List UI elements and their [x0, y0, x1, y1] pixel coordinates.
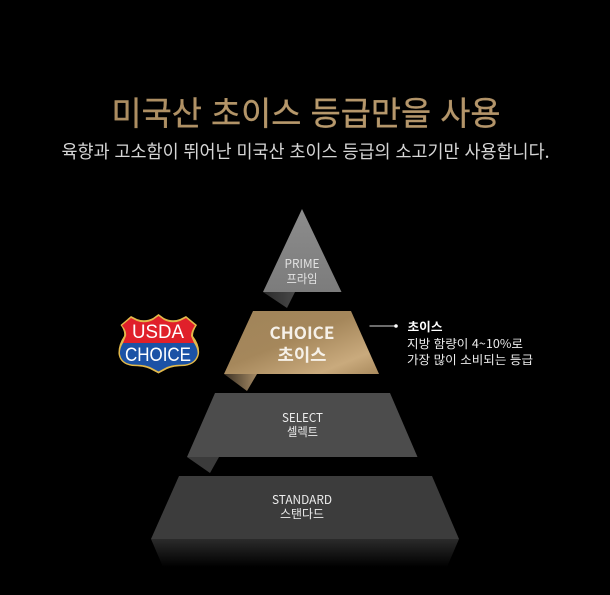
choice fold	[224, 374, 257, 391]
prime triangle	[263, 209, 342, 292]
subtitle: 육향과 고소함이 뛰어난 미국산 초이스 등급의 소고기만 사용합니다.	[62, 138, 550, 164]
choice label: CHOICE	[270, 319, 334, 344]
callout: choice description	[370, 318, 533, 368]
panel: choice tier	[224, 311, 379, 391]
standard label: STANDARD	[272, 491, 332, 508]
callout line two: 가장 많이 소비되는 등급	[407, 351, 533, 368]
panel: prime tier	[263, 209, 342, 308]
callout leader line	[370, 325, 396, 327]
panel: select tier	[187, 393, 418, 473]
callout line one: 지방 함량이 4~10%로	[407, 335, 523, 352]
title: 미국산 초이스 등급만을 사용	[112, 87, 500, 135]
select label: SELECT	[282, 409, 323, 426]
choice trapezoid	[224, 311, 379, 374]
select trapezoid	[187, 393, 418, 457]
standard reflection	[151, 539, 459, 567]
usda text: USDA	[132, 321, 184, 343]
panel: standard tier	[151, 476, 459, 567]
prime fold	[263, 292, 295, 308]
prime label korean: 프라임	[286, 270, 318, 287]
select label korean: 셀렉트	[287, 423, 318, 440]
standard label korean: 스탠다드	[280, 505, 324, 522]
choice text: CHOICE	[125, 344, 191, 366]
icon: USDA choice shield	[118, 314, 199, 374]
choice label korean: 초이스	[278, 341, 326, 366]
select fold	[187, 457, 219, 473]
standard trapezoid	[151, 476, 459, 539]
prime label: PRIME	[284, 255, 320, 272]
callout heading: 초이스	[408, 318, 442, 335]
